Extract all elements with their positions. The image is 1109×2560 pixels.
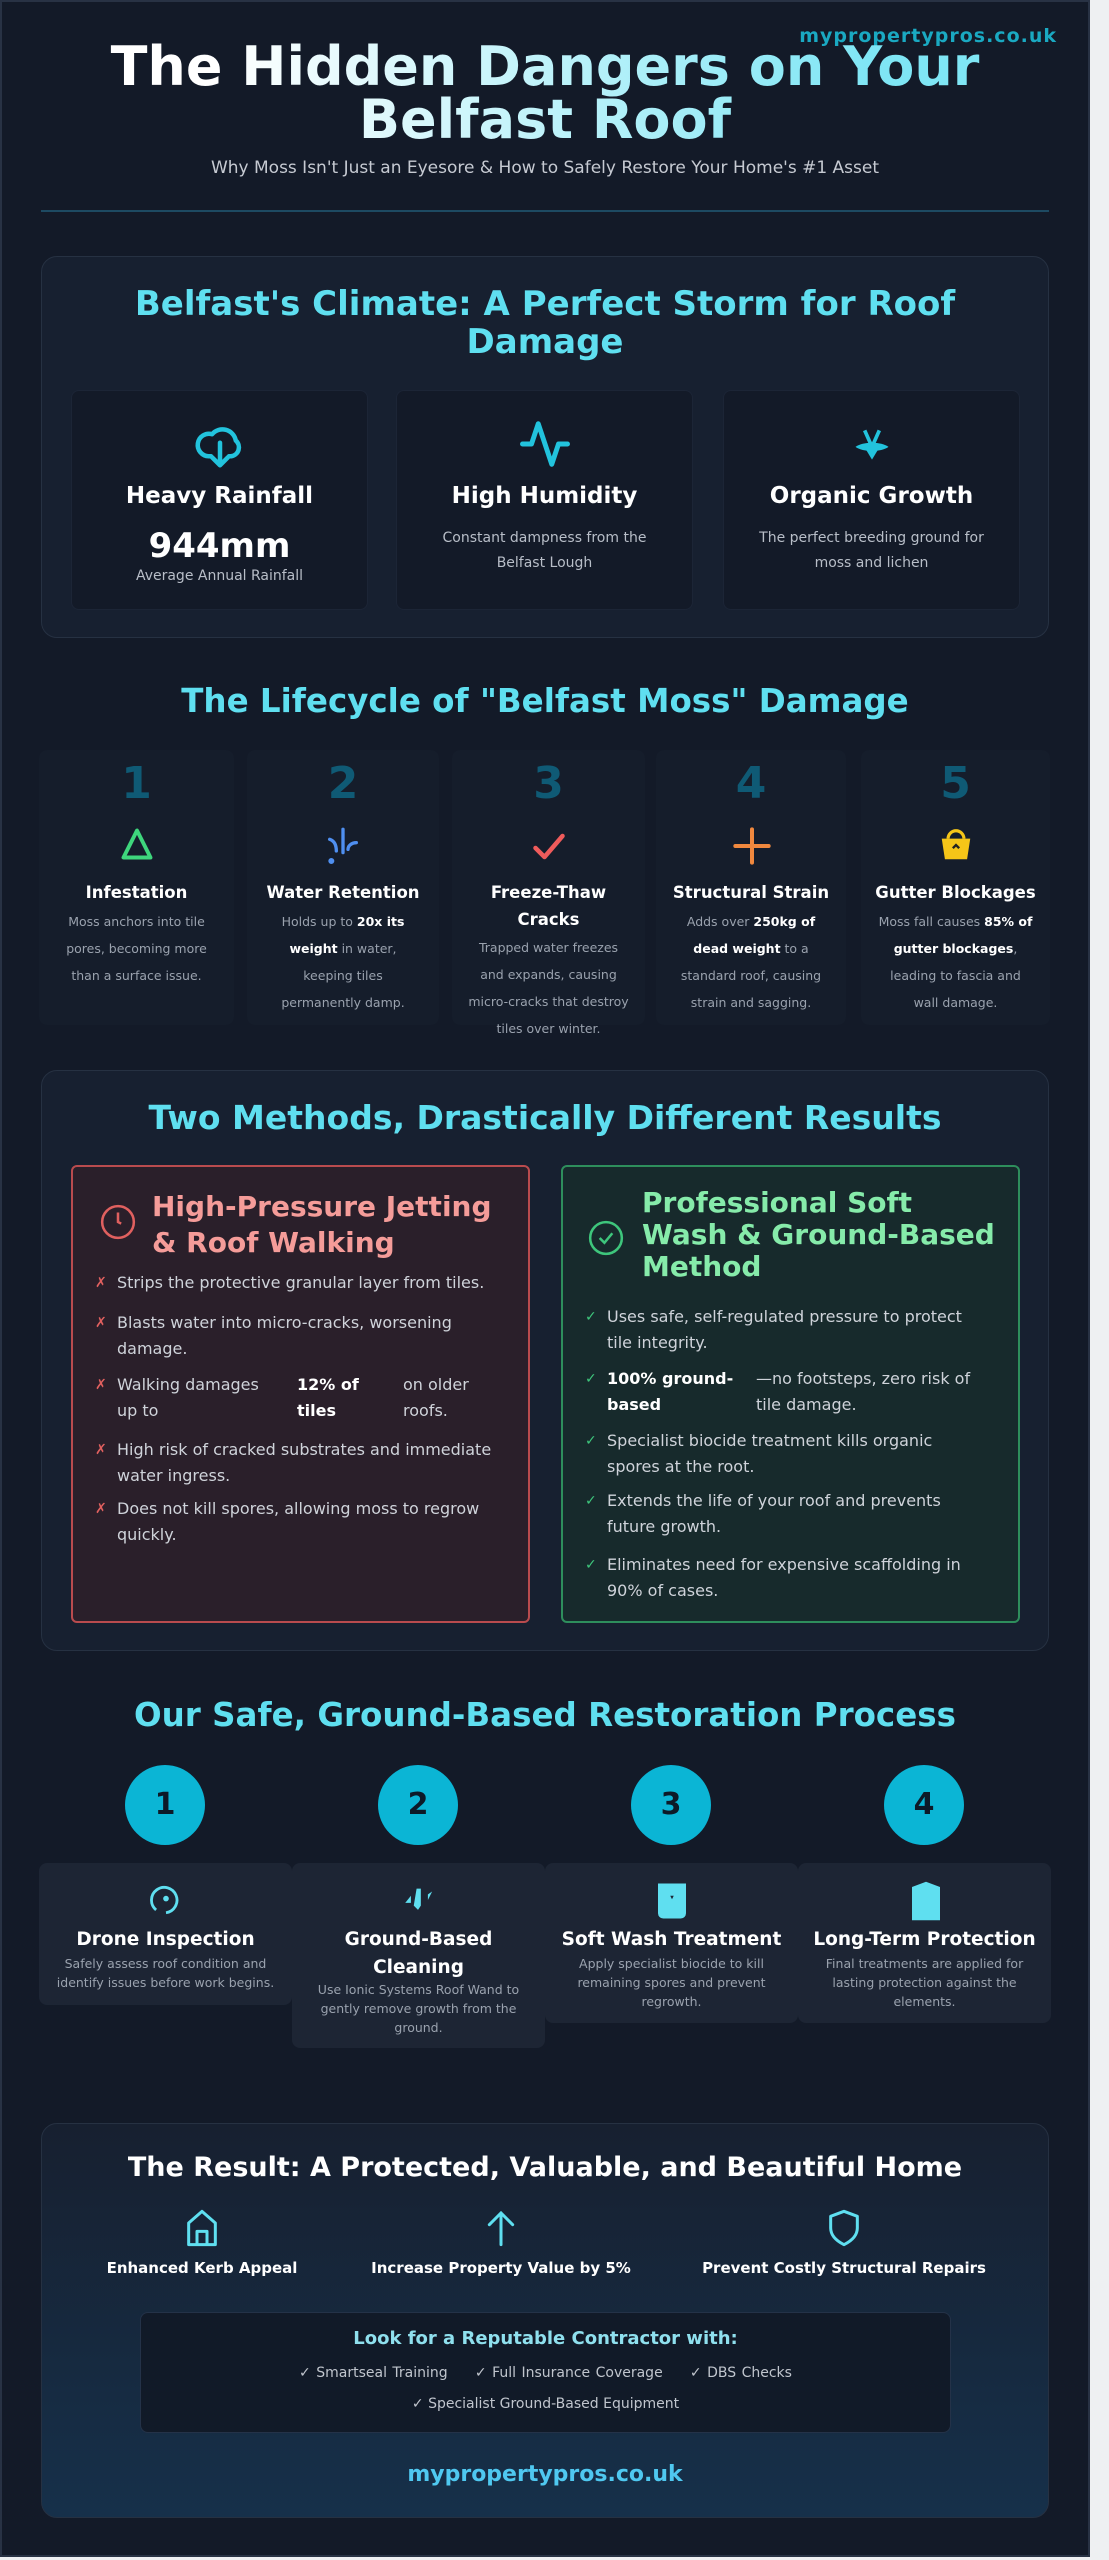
icon: pulse <box>520 421 570 467</box>
icon: drone <box>150 1886 178 1914</box>
box: high-pressure: Walking damages up to <box>117 1375 259 1420</box>
step circles <box>125 1765 964 1845</box>
card: organic growth: Organic Growth <box>770 483 973 509</box>
card: freeze-thaw: Freeze-Thaw <box>491 883 606 902</box>
box: high-pressure: 12% of tiles <box>297 1375 359 1420</box>
card: freeze-thaw: Trapped water freezes and expands, causing micro-cracks that destroy tiles over winter. <box>468 940 629 1036</box>
icon: bucket <box>658 1884 686 1918</box>
text: 4 <box>914 1787 934 1822</box>
box: high-pressure: Strips the protective granular layer from tiles. <box>117 1273 484 1292</box>
benefit: kerb appeal: Enhanced Kerb Appeal <box>107 2259 297 2277</box>
card: freeze-thaw: 3 <box>533 758 564 809</box>
card: humidity <box>396 390 693 610</box>
step: long-term protection: Final treatments are applied for lasting protection against the elements. <box>826 1956 1023 2009</box>
card: organic growth: The perfect breeding ground for moss and lichen <box>759 530 984 571</box>
heading: high-pressure <box>152 1190 492 1259</box>
icon: check circle <box>588 1220 624 1256</box>
card: infestation <box>39 750 234 1025</box>
card: structural strain: 4 <box>736 758 766 809</box>
box: soft wash: Eliminates need for expensive scaffolding in 90% of cases. <box>607 1555 961 1600</box>
box: high-pressure: High risk of cracked substrates and immediate water ingress. <box>117 1440 491 1485</box>
icon: block <box>912 1882 940 1920</box>
heading: methods: Two Methods, Drastically Different Results <box>148 1098 941 1137</box>
text: 3 <box>661 1787 681 1822</box>
step: ground-based cleaning <box>292 1863 545 2048</box>
box: high-pressure: ✗ <box>95 1501 107 1517</box>
card: infestation: Moss anchors into tile pores, becoming more than a surface issue. <box>66 914 207 983</box>
step: ground-based cleaning: Cleaning <box>373 1957 464 1978</box>
card: heavy rainfall <box>71 390 368 610</box>
card: water retention <box>247 750 439 1025</box>
box: soft wash: 100% ground-based <box>607 1369 733 1414</box>
contractor box: Look for a Reputable Contractor with: <box>353 2328 738 2349</box>
box: soft wash: ✓ <box>585 1371 597 1387</box>
contractor box: ✓ Specialist Ground-Based Equipment <box>412 2396 679 2412</box>
contractor box: ✓ Smartseal Training ✓ Full Insurance Coverage ✓ DBS Checks <box>299 2365 792 2381</box>
box: soft wash: Extends the life of your roof and prevents future growth. <box>607 1491 941 1536</box>
card: water retention: Water Retention <box>266 883 420 902</box>
step: soft wash treatment: Soft Wash Treatment <box>562 1929 781 1950</box>
benefit: property value: Increase Property Value by 5% <box>371 2259 631 2277</box>
card: heavy rainfall: 944mm <box>149 526 290 566</box>
watermark url: mypropertypros.co.uk <box>799 25 1057 47</box>
box: soft wash: Specialist biocide treatment kills organic spores at the root. <box>607 1431 932 1476</box>
card: water retention: Holds up to 20x its weight in water, keeping tiles permanently damp. <box>281 914 405 1010</box>
card: freeze-thaw: Cracks <box>518 910 579 929</box>
card: humidity: High Humidity <box>452 483 637 509</box>
icon: triangle <box>122 828 152 860</box>
box: soft wash: —no footsteps, zero risk of tile damage. <box>756 1369 970 1414</box>
step: long-term protection <box>798 1863 1051 2023</box>
card: infestation: 1 <box>121 758 152 809</box>
heading: result: The Result: A Protected, Valuable, and Beautiful Home <box>128 2152 962 2183</box>
benefit: prevent repairs <box>702 2210 986 2277</box>
card: organic growth <box>723 390 1020 610</box>
card: gutter blockages <box>861 750 1050 1025</box>
panel: result <box>41 2123 1049 2518</box>
box: high-pressure: ✗ <box>95 1377 107 1393</box>
step: ground-based cleaning: Use Ionic Systems Roof Wand to gently remove growth from the ground. <box>318 1982 519 2035</box>
benefit: kerb appeal <box>107 2210 297 2277</box>
box: high-pressure <box>71 1165 530 1623</box>
icon: plus <box>733 827 771 865</box>
icon: clock <box>100 1204 136 1240</box>
box: soft wash: ✓ <box>585 1557 597 1573</box>
box: high-pressure: Blasts water into micro-cracks, worsening damage. <box>117 1313 452 1358</box>
heading: process: Our Safe, Ground-Based Restoration Process <box>134 1696 956 1734</box>
card: structural strain: Adds over 250kg of dead weight to a standard roof, causing strain and sagging. <box>681 914 821 1010</box>
step: ground-based cleaning: Ground-Based <box>345 1929 492 1950</box>
box: soft wash: ✓ <box>585 1433 597 1449</box>
card: gutter blockages: Gutter Blockages <box>875 883 1036 902</box>
box: soft wash: ✓ <box>585 1493 597 1509</box>
icon: growth <box>856 430 888 460</box>
box: high-pressure: Does not kill spores, allowing moss to regrow quickly. <box>117 1499 479 1544</box>
card: water retention: 2 <box>328 758 358 809</box>
card: structural strain: Structural Strain <box>673 883 829 902</box>
benefit: prevent repairs: Prevent Costly Structural Repairs <box>702 2259 986 2277</box>
panel: climate <box>41 256 1049 638</box>
heading: climate: Damage <box>467 322 623 362</box>
card: heavy rainfall: Heavy Rainfall <box>126 483 313 509</box>
card: structural strain <box>656 750 846 1025</box>
heading: soft wash <box>642 1186 995 1283</box>
benefit: property value <box>371 2211 631 2277</box>
step: drone inspection <box>39 1863 292 2005</box>
heading: lifecycle: The Lifecycle of "Belfast Moss" Damage <box>181 682 909 720</box>
footer url: mypropertypros.co.uk <box>407 2462 683 2487</box>
card: humidity: Constant dampness from the Belfast Lough <box>443 530 646 571</box>
heading: high-pressure: & Roof Walking <box>152 1226 395 1259</box>
box: high-pressure: on older roofs. <box>403 1375 469 1420</box>
heading: soft wash: Method <box>642 1250 761 1283</box>
title: The Hidden Dangers on Your <box>111 35 979 98</box>
heading: climate <box>135 284 956 362</box>
contractor box <box>140 2312 951 2433</box>
title <box>0 40 1090 146</box>
card: infestation: Infestation <box>86 883 187 902</box>
card: gutter blockages: Moss fall causes 85% of gutter blockages, leading to fascia and wall damage. <box>879 914 1032 1010</box>
box: high-pressure: ✗ <box>95 1275 107 1291</box>
text: 1 <box>155 1787 175 1822</box>
icon: crack check <box>533 834 565 860</box>
step: soft wash treatment: Apply specialist biocide to kill remaining spores and prevent regrowth. <box>577 1956 766 2009</box>
box: soft wash <box>561 1165 1020 1623</box>
panel: two methods <box>41 1070 1049 1651</box>
card: gutter blockages: 5 <box>940 758 971 809</box>
icon: splash <box>328 828 358 864</box>
heading: high-pressure: High-Pressure Jetting <box>152 1190 492 1223</box>
title: Belfast Roof <box>359 88 731 151</box>
card: freeze-thaw <box>452 750 645 1025</box>
step: drone inspection: Safely assess roof condition and identify issues before work begins. <box>57 1956 274 1990</box>
icon: bucket <box>942 829 970 860</box>
icon: cloud download <box>196 427 242 468</box>
box: soft wash: Uses safe, self-regulated pressure to protect tile integrity. <box>607 1307 962 1352</box>
heading: climate: Belfast's Climate: A Perfect Storm for Roof <box>135 284 955 324</box>
step: drone inspection: Drone Inspection <box>76 1929 255 1950</box>
box: high-pressure: ✗ <box>95 1315 107 1331</box>
step: soft wash treatment <box>545 1863 798 2023</box>
heading: soft wash: Professional Soft <box>642 1186 912 1219</box>
box: soft wash: ✓ <box>585 1309 597 1325</box>
card: heavy rainfall: Average Annual Rainfall <box>136 568 303 584</box>
text: 2 <box>408 1787 428 1822</box>
box: high-pressure: ✗ <box>95 1442 107 1458</box>
subtitle: Why Moss Isn't Just an Eyesore & How to Safely Restore Your Home's #1 Asset <box>211 158 879 178</box>
step: long-term protection: Long-Term Protection <box>813 1929 1036 1950</box>
heading: soft wash: Wash & Ground-Based <box>642 1218 995 1251</box>
icon: wand <box>405 1888 432 1910</box>
